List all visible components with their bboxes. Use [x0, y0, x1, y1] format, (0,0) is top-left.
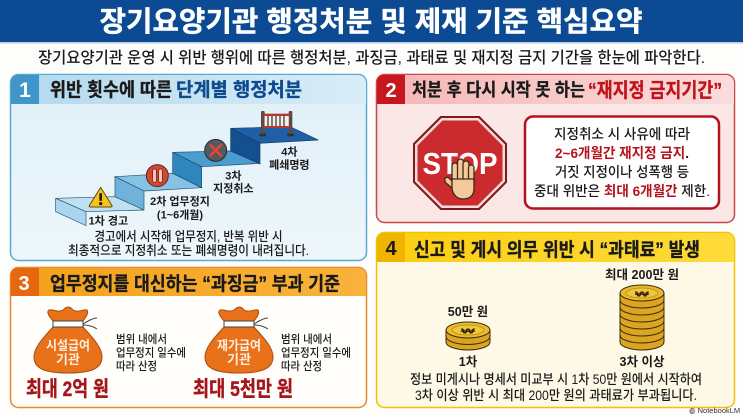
icon: stop sign with hand: STOP — [422, 146, 498, 181]
surcharge basis, home care: 업무정지 일수에 — [281, 346, 351, 360]
watermark: ◍ NotebookLM — [689, 406, 740, 415]
third offence: coin stack: ₩ — [635, 290, 650, 298]
panel 1 description — [68, 229, 309, 258]
step labels: (1~6개월) — [157, 207, 203, 221]
icon: stop sign with hand — [413, 116, 507, 210]
icon: money bag, facility care: 시설급여 — [46, 338, 90, 353]
panel 4 description: 3차 이상 위반 시 최대 200만 원의 과태료가 부과됩니다. — [415, 388, 697, 403]
panel 1 number: 1 — [19, 79, 31, 102]
panel 2 heading — [412, 79, 722, 102]
panel 4 heading: 신고 및 게시 의무 위반 시 “과태료” 발생 — [414, 239, 700, 261]
first offence: coin stack — [446, 305, 490, 369]
third offence: coin stack: 3차 이상 — [620, 355, 665, 369]
amount, facility care: 최대 2억 원 — [26, 378, 109, 401]
panel 1 heading: 단계별 행정처분 — [176, 79, 302, 101]
callout: ban period — [525, 116, 719, 208]
panel 1: staged administrative action — [10, 74, 366, 260]
panel 2: re-designation ban — [376, 74, 734, 222]
surcharge basis, facility care — [116, 333, 186, 373]
panel 1 description: 최종적으로 지정취소 또는 폐쇄명령이 내려집니다. — [68, 243, 309, 258]
panel 2 number: 2 — [385, 80, 397, 102]
step labels: 지정취소 — [213, 181, 254, 195]
third offence: coin stack — [605, 268, 679, 369]
panel 4 description: 정보 미게시나 명세서 미교부 시 1차 50만 원에서 시작하여 — [410, 372, 702, 387]
step labels: 1차 경고 — [89, 214, 128, 227]
step labels — [89, 146, 310, 227]
surcharge basis, facility care: 업무정지 일수에 — [116, 346, 186, 360]
first offence: coin stack: ₩ — [461, 327, 476, 335]
amount, home care: 최대 5천만 원 — [193, 378, 293, 401]
surcharge basis, home care: 따라 산정 — [281, 360, 322, 373]
callout: ban period: 중대 위반은 최대 6개월간 제한. — [534, 183, 710, 199]
step labels: 3차 — [225, 169, 241, 182]
surcharge basis, home care — [281, 333, 351, 373]
panel 4: administrative fine — [376, 232, 734, 408]
third offence: coin stack: 최대 200만 원 — [605, 268, 679, 282]
panel 1 heading: 위반 횟수에 따른 — [50, 79, 172, 101]
callout: ban period: 거짓 지정이나 성폭행 등 — [555, 164, 689, 180]
subtitle: 장기요양기관 운영 시 위반 행위에 따른 행정처분, 과징금, 과태료 및 재지정 금지 기간을 한눈에 파악한다. — [38, 49, 705, 67]
step labels: 폐쇄명령 — [269, 157, 310, 171]
panel 3 number: 3 — [18, 273, 30, 295]
icon: money bag, home care: 재가급여 — [217, 338, 261, 353]
panel 3 heading: 업무정지를 대신하는 “과징금” 부과 기준 — [50, 273, 340, 295]
callout: ban period: 2~6개월간 재지정 금지. — [555, 145, 689, 161]
first offence: coin stack: 50만 원 — [448, 305, 488, 319]
panel 4 description — [410, 372, 702, 403]
title banner — [0, 0, 743, 60]
panel 3: penalty surcharge — [10, 268, 366, 408]
icon: money bag, facility care: 기관 — [56, 352, 80, 367]
callout: ban period: 지정취소 시 사유에 따라 — [554, 126, 690, 142]
icon: money bag, home care: 기관 — [227, 352, 251, 367]
icon: pause — [146, 165, 168, 187]
icon: cancel — [205, 139, 227, 161]
icon: money bag, facility care — [34, 307, 102, 373]
icon: money bag, home care — [205, 307, 273, 373]
panel 2 heading: 처분 후 다시 시작 못 하는 — [412, 80, 585, 100]
staircase chart — [56, 111, 318, 227]
first offence: coin stack: 1차 — [459, 355, 478, 369]
icon: warning triangle — [89, 187, 112, 207]
surcharge basis, home care: 범위 내에서 — [281, 333, 332, 346]
step labels: 4차 — [281, 146, 297, 159]
surcharge basis, facility care: 따라 산정 — [116, 360, 157, 373]
icon: closed gate — [259, 111, 294, 136]
panel 2 heading: “재지정 금지기간” — [588, 79, 722, 102]
panel 1 heading — [50, 79, 302, 101]
panel 1 description: 경고에서 시작해 업무정지, 반복 위반 시 — [94, 229, 282, 244]
step labels: 2차 업무정지 — [150, 195, 210, 208]
panel 4 number: 4 — [385, 238, 397, 260]
title banner: 장기요양기관 행정처분 및 제재 기준 핵심요약 — [100, 6, 642, 37]
surcharge basis, facility care: 범위 내에서 — [116, 333, 167, 346]
